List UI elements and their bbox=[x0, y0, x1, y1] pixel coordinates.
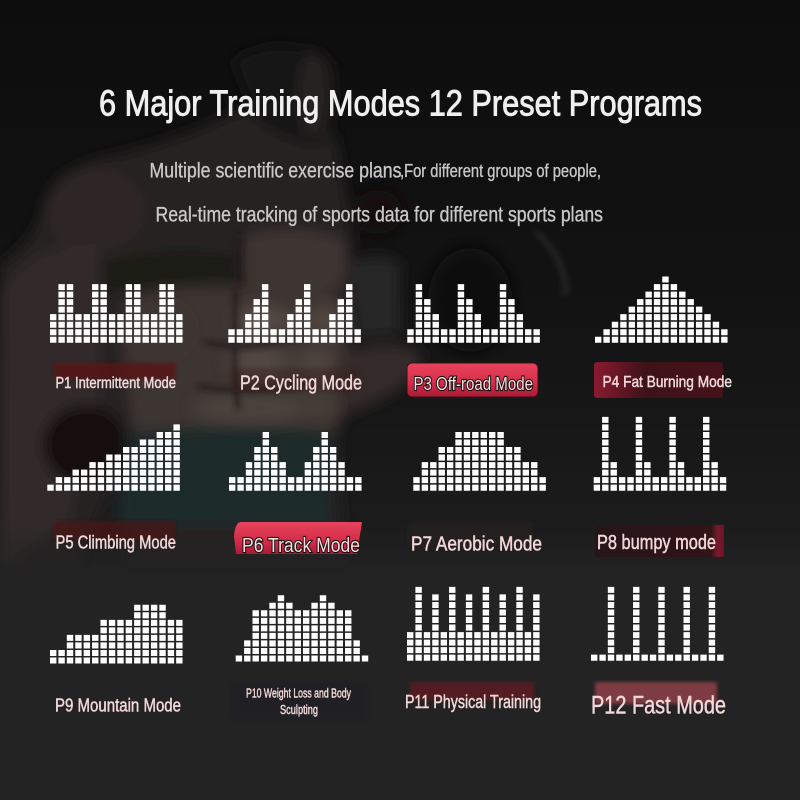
subtitle: ,For different groups of people, bbox=[400, 160, 601, 181]
label: P5 Climbing Mode: P5 Climbing Mode bbox=[56, 532, 176, 552]
chart: P10 pattern bbox=[239, 594, 365, 662]
chart: P7 pattern bbox=[416, 430, 543, 491]
label: P7 Aerobic Mode bbox=[408, 522, 542, 556]
chart: P8 pattern bbox=[597, 415, 723, 491]
chart: P5 pattern bbox=[50, 423, 177, 491]
label: P12 Fast Mode bbox=[591, 682, 726, 720]
chart: P6 pattern bbox=[232, 430, 358, 491]
label: P10 Weight Loss and Body Sculpting: P10 Weight Loss and Body bbox=[246, 686, 352, 700]
subtitle: Multiple scientific exercise plans bbox=[150, 160, 402, 182]
label: P3 Off-road Mode button: P3 Off-road Mode bbox=[414, 374, 533, 394]
label: P4 Fat Burning Mode bbox=[594, 362, 732, 398]
label: P4 Fat Burning Mode: P4 Fat Burning Mode bbox=[602, 374, 732, 391]
label: P1 Intermittent Mode: P1 Intermittent Mode bbox=[56, 375, 176, 392]
label: P5 Climbing Mode bbox=[54, 521, 176, 552]
label: P6 Track Mode button: P6 Track Mode bbox=[242, 535, 360, 557]
label: P11 Physical Training bbox=[405, 682, 541, 712]
label: P2 Cycling Mode bbox=[232, 368, 362, 394]
subtitle: Real-time tracking of sports data for different sports plans bbox=[156, 204, 603, 226]
chart: P1 pattern bbox=[53, 283, 179, 343]
label: P2 Cycling Mode: P2 Cycling Mode bbox=[240, 372, 362, 394]
label: P10 Weight Loss and Body Sculpting: Sculpting bbox=[280, 703, 318, 717]
label: P8 bumpy mode bbox=[595, 525, 724, 557]
label: P8 bumpy mode: P8 bumpy mode bbox=[597, 532, 716, 554]
chart: P2 pattern bbox=[231, 283, 358, 343]
label: P9 Mountain Mode: P9 Mountain Mode bbox=[55, 694, 181, 716]
label: P3 Off-road Mode button bbox=[407, 363, 538, 397]
chart: P3 pattern bbox=[410, 283, 537, 343]
label: P1 Intermittent Mode bbox=[54, 363, 176, 392]
chart: P4 pattern bbox=[598, 275, 724, 343]
label: P12 Fast Mode: P12 Fast Mode bbox=[591, 692, 726, 720]
chart: P11 pattern bbox=[410, 585, 536, 661]
label: P6 Track Mode button bbox=[234, 522, 362, 557]
chart: P9 pattern bbox=[53, 603, 179, 664]
subtitle bbox=[150, 160, 603, 226]
label: P7 Aerobic Mode: P7 Aerobic Mode bbox=[411, 534, 542, 556]
chart: P12 pattern bbox=[594, 585, 720, 661]
label: P10 Weight Loss and Body Sculpting bbox=[232, 684, 366, 720]
label: P11 Physical Training: P11 Physical Training bbox=[405, 692, 541, 712]
title: 6 Major Training Modes 12 Preset Programs bbox=[99, 82, 702, 124]
